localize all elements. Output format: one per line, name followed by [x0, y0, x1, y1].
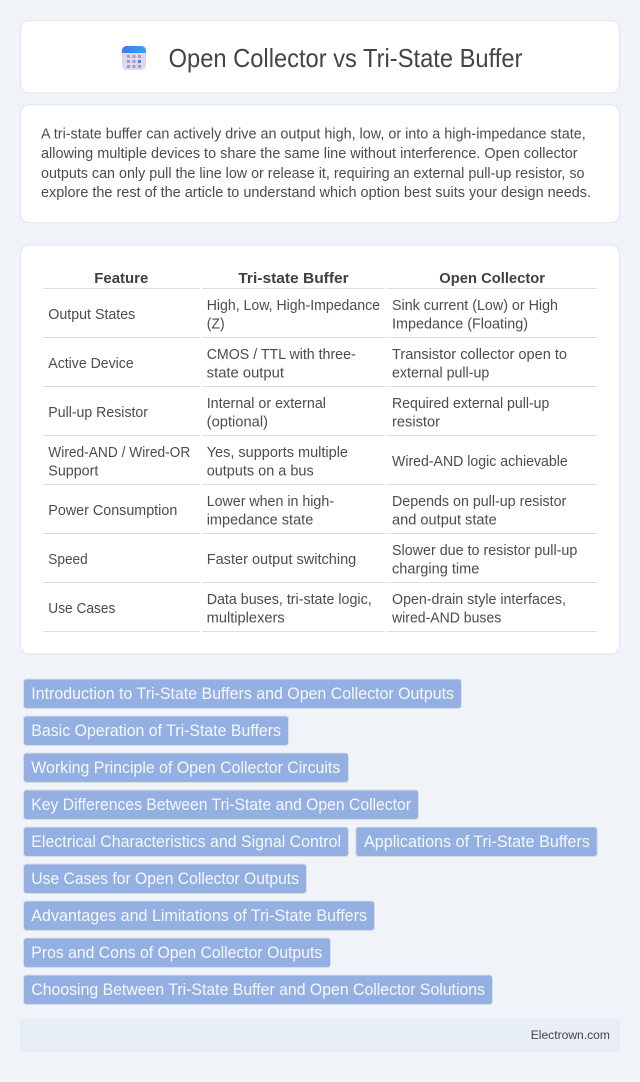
table row: pull-up resistor: Pull-up Resistor: [48, 405, 148, 421]
table row: power consumption: Power Consumption: [48, 503, 177, 519]
panel: title header: [21, 21, 619, 93]
table row: power consumption: impedance state: [207, 512, 313, 528]
title: Open Collector vs Tri-State Buffer: [169, 45, 523, 73]
chip: advantages: Advantages and Limitations of Tri-State Buffers: [31, 906, 367, 925]
chip: choosing between: [24, 975, 492, 1004]
table row: power consumption: Lower when in high-: [207, 494, 334, 510]
chip: electrical characteristics: [24, 827, 348, 856]
table row: output states: Impedance (Floating): [392, 316, 528, 332]
table row: pull-up resistor: resistor: [392, 414, 440, 430]
chip: key differences: Key Differences Between Tri-State and Open Collector: [31, 795, 411, 814]
table row: pull-up resistor: (optional): [207, 414, 268, 430]
table row: pull-up resistor: Required external pull-up: [392, 396, 549, 412]
intro paragraph: outputs can only pull the line low or release it, requiring an external pull-up resistor, so: [41, 165, 584, 182]
footer credit: Electrown.com: [531, 1028, 610, 1042]
chip: basic operation: [24, 716, 288, 746]
intro paragraph: explore the rest of the article to understand which option best suits your design needs.: [41, 184, 591, 201]
table row: wired-AND support: outputs on a bus: [207, 463, 314, 479]
table row: output states: [43, 298, 597, 338]
table row: use cases: Open-drain style interfaces,: [392, 592, 566, 608]
table row: speed: Slower due to resistor pull-up: [392, 543, 577, 559]
table row: power consumption: Depends on pull-up resistor: [392, 494, 566, 510]
panel: comparison table: [21, 245, 619, 654]
table row: use cases: wired-AND buses: [391, 610, 501, 626]
table row: power consumption: [43, 494, 597, 534]
table row: power consumption: and output state: [392, 512, 497, 528]
table row: active device: CMOS / TTL with three-: [207, 347, 356, 363]
icon: calendar: [122, 46, 146, 70]
table row: output states: Output States: [48, 307, 135, 323]
table row: speed: [43, 543, 597, 583]
table row: output states: (Z): [207, 316, 225, 332]
table row: active device: Transistor collector open to: [392, 347, 567, 363]
table row: pull-up resistor: [43, 396, 597, 436]
table row: wired-AND support: [43, 445, 597, 485]
table row: use cases: Data buses, tri-state logic,: [207, 592, 372, 608]
chip: working principle: Working Principle of Open Collector Circuits: [31, 758, 340, 777]
table header row: Feature: [94, 270, 148, 287]
topic chips: [24, 679, 597, 1004]
table row: wired-AND support: Wired-AND logic achievable: [392, 454, 568, 470]
table row: output states: High, Low, High-Impedance: [207, 298, 380, 314]
chip: applications: [356, 827, 597, 856]
table row: pull-up resistor: Internal or external: [207, 396, 326, 412]
intro paragraph: A tri-state buffer can actively drive an output high, low, or into a high-impedance state,: [41, 126, 586, 143]
chip: introduction: Introduction to Tri-State Buffers and Open Collector Outputs: [31, 684, 454, 703]
table row: active device: Active Device: [48, 356, 134, 372]
table row: speed: Faster output switching: [207, 552, 356, 568]
chip: pros and cons: [24, 938, 330, 968]
table row: speed: Speed: [48, 552, 88, 568]
table header row: Tri-state Buffer: [238, 270, 349, 287]
panel: introduction text: [21, 105, 619, 223]
table row: wired-AND support: Wired-AND / Wired-OR: [48, 445, 190, 461]
table header row: Open Collector: [439, 270, 545, 287]
chip: pros and cons: Pros and Cons of Open Collector Outputs: [31, 943, 322, 962]
chip: electrical characteristics: Electrical Characteristics and Signal Control: [31, 832, 341, 851]
table row: active device: external pull-up: [392, 365, 489, 381]
chip: applications: Applications of Tri-State Buffers: [364, 832, 590, 851]
table row: use cases: Use Cases: [48, 601, 115, 617]
intro paragraph: allowing multiple devices to share the same line without interference. Open collector: [41, 145, 578, 162]
table row: wired-AND support: Support: [48, 463, 98, 479]
chip: working principle: [24, 753, 348, 782]
table header row: [43, 270, 597, 289]
table row: output states: Sink current (Low) or High: [392, 298, 558, 314]
table row: use cases: multiplexers: [207, 610, 285, 626]
chip: use cases: [24, 864, 306, 894]
table row: speed: charging time: [392, 561, 479, 577]
chip: use cases: Use Cases for Open Collector Outputs: [31, 869, 299, 888]
footer bar: [20, 1018, 620, 1052]
table row: wired-AND support: Yes, supports multiple: [207, 445, 348, 461]
table row: active device: [43, 347, 597, 387]
chip: introduction: [24, 679, 462, 708]
table row: use cases: [43, 592, 597, 632]
table row: active device: state output: [207, 365, 284, 381]
chip: basic operation: Basic Operation of Tri-State Buffers: [31, 721, 281, 740]
chip: advantages: [24, 901, 374, 930]
chip: choosing between: Choosing Between Tri-State Buffer and Open Collector Solutions: [31, 980, 485, 999]
chip: key differences: [24, 790, 418, 820]
intro paragraph: [41, 126, 591, 201]
